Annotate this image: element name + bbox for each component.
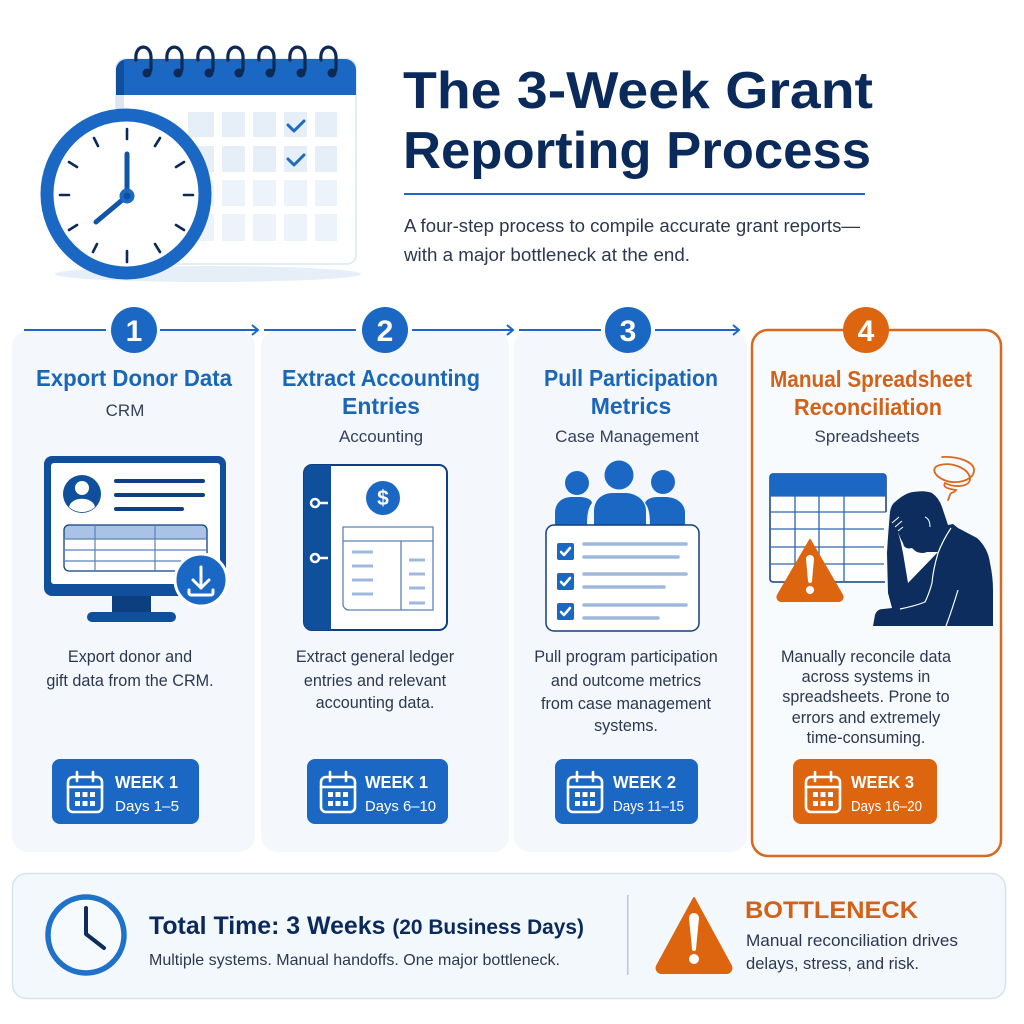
system label: Case Management: Case Management: [555, 427, 699, 446]
icon: warning triangle: [777, 540, 843, 601]
system label: Spreadsheets: Spreadsheets: [815, 427, 919, 446]
heading: step 4: [770, 366, 972, 420]
heading: step 4: Reconciliation: [794, 394, 942, 420]
badge: week 1, days 6-10: Days 6–10: [365, 798, 436, 815]
badge: week 1, days 6-10: [307, 759, 448, 824]
bottleneck text: delays, stress, and risk.: [746, 955, 919, 973]
description: step 4: time-consuming.: [807, 729, 925, 747]
badge: week 3, days 16-20: WEEK 3: [851, 772, 914, 792]
title: The 3-Week Grant: [403, 62, 873, 120]
bottleneck text: [745, 897, 958, 973]
title: Reporting Process: [403, 122, 871, 180]
subtitle: [403, 215, 860, 265]
total time text: [149, 912, 584, 969]
icon: summary clock: [48, 897, 124, 973]
bottleneck text: BOTTLENECK: [745, 897, 919, 924]
icon: clock: [47, 115, 205, 273]
description: step 4: errors and extremely: [792, 709, 941, 727]
description: step 2: [296, 648, 455, 712]
badge: week 1, days 1-5: WEEK 1: [115, 772, 178, 792]
description: step 3: systems.: [594, 717, 658, 735]
description: step 3: from case management: [541, 695, 712, 713]
step number 2: [362, 307, 408, 353]
panel: step 2: [261, 330, 509, 852]
heading: step 2: [282, 365, 480, 419]
description: step 2: entries and relevant: [304, 672, 447, 690]
badge: week 3, days 16-20: Days 16–20: [851, 798, 922, 815]
icon: stressed person: [873, 491, 993, 626]
description: step 1: Export donor and: [68, 648, 192, 666]
step number 3: 3: [620, 315, 636, 348]
icon: ledger binder: $: [377, 487, 389, 510]
bottleneck text: Manual reconciliation drives: [746, 932, 958, 950]
step number 4: 4: [858, 315, 875, 348]
icon: CRM monitor with download: [44, 456, 227, 622]
description: step 4: spreadsheets. Prone to: [782, 688, 950, 706]
system label: Accounting: Accounting: [339, 427, 423, 446]
panel: summary: [12, 874, 1006, 998]
heading: step 3: Metrics: [591, 393, 671, 419]
description: step 4: Manually reconcile data: [781, 648, 951, 666]
hero illustration: calendar and clock: [47, 47, 361, 282]
icon: wall calendar: [116, 47, 356, 264]
description: step 1: [46, 648, 214, 690]
heading: step 2: Entries: [342, 393, 420, 419]
step number 2: 2: [377, 315, 393, 348]
title: [403, 62, 873, 180]
badge: week 2, days 11-15: WEEK 2: [613, 772, 676, 792]
subtitle: with a major bottleneck at the end.: [403, 244, 690, 265]
step number 4: [843, 307, 889, 353]
badge: week 1, days 6-10: WEEK 1: [365, 772, 428, 792]
description: step 3: and outcome metrics: [551, 672, 701, 690]
icon: stress swirl: [934, 457, 974, 500]
heading: step 3: Pull Participation: [544, 365, 718, 391]
description: step 2: accounting data.: [316, 694, 434, 712]
icon: bottleneck warning: [657, 898, 731, 973]
icon: ledger binder: [304, 465, 447, 630]
description: step 3: [534, 648, 718, 735]
total time text: Total Time: 3 Weeks (20 Business Days): [149, 912, 584, 940]
badge: week 2, days 11-15: Days 11–15: [613, 798, 684, 815]
description: step 3: Pull program participation: [534, 648, 718, 666]
process flow: numbered steps and arrows: [24, 307, 889, 353]
icon: spreadsheet: [770, 474, 886, 582]
subtitle: A four-step process to compile accurate grant reports—: [404, 215, 860, 236]
heading: step 1: Export Donor Data: [36, 365, 232, 391]
heading: step 2: Extract Accounting: [282, 365, 480, 391]
badge: week 1, days 1-5: Days 1–5: [115, 798, 179, 815]
description: step 2: Extract general ledger: [296, 648, 455, 666]
heading: step 4: Manual Spreadsheet: [770, 366, 972, 392]
description: step 4: [781, 648, 951, 747]
total time text: Multiple systems. Manual handoffs. One major bottleneck.: [149, 952, 560, 969]
panel: step 4 (highlighted): [752, 330, 1001, 856]
badge: week 1, days 1-5: [52, 759, 199, 824]
description: step 4: across systems in: [802, 668, 930, 686]
system label: CRM: CRM: [106, 401, 144, 420]
badge: week 3, days 16-20: [793, 759, 937, 824]
panel: step 3: [514, 330, 747, 852]
panel: step 1: [12, 330, 255, 852]
step number 3: [605, 307, 651, 353]
step number 1: 1: [126, 315, 142, 348]
step number 1: [111, 307, 157, 353]
badge: week 2, days 11-15: [555, 759, 698, 824]
icon: people and checklist: [546, 460, 699, 631]
heading: step 3: [544, 365, 718, 419]
description: step 1: gift data from the CRM.: [46, 672, 214, 690]
